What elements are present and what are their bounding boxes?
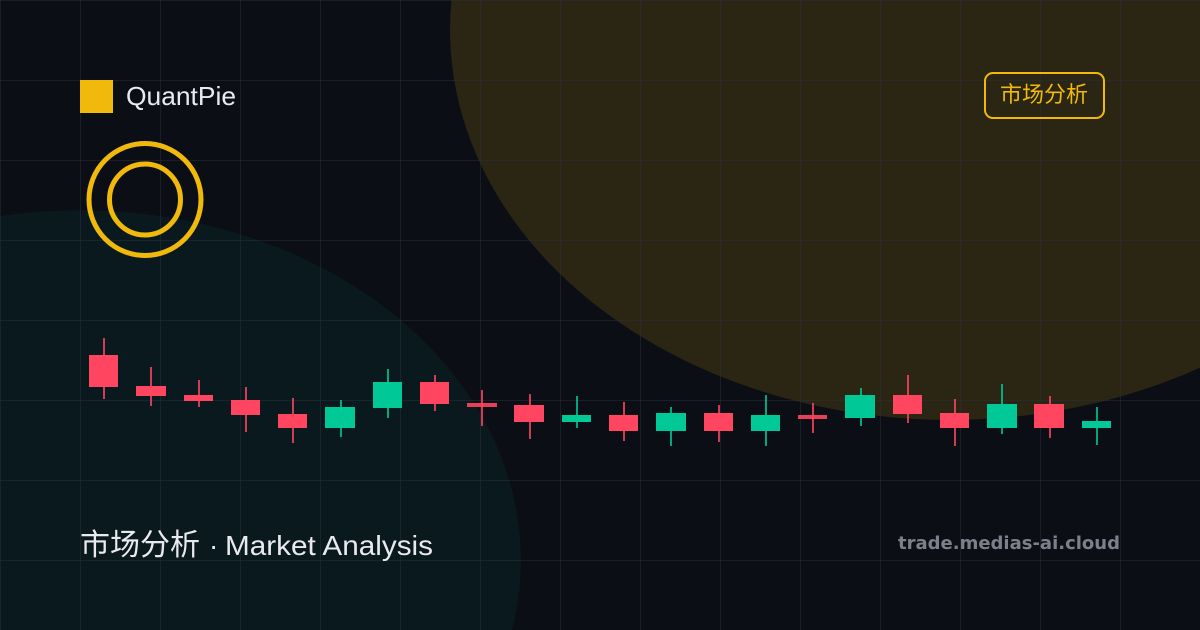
candle 8	[420, 375, 449, 411]
icon: concentric rings	[89, 144, 201, 256]
footer title: ·	[209, 530, 218, 561]
candle 9	[467, 390, 497, 426]
candle 18	[893, 375, 922, 423]
candle 5	[278, 398, 307, 443]
background blob: teal	[0, 210, 521, 630]
tag: market analysis: 市场分析	[1000, 77, 1088, 109]
candle 16	[798, 403, 827, 433]
candle 19	[940, 399, 969, 446]
tag: market analysis	[985, 73, 1104, 118]
footer title: 市场分析	[80, 520, 200, 564]
candle 11	[562, 396, 591, 428]
candle 22	[1082, 407, 1111, 445]
candle 21	[1034, 396, 1064, 438]
candle 7	[373, 369, 402, 418]
candle 10	[514, 394, 544, 439]
background blob: gold	[450, 0, 1200, 420]
candle 14	[704, 405, 733, 442]
candle 2	[136, 367, 166, 406]
icon: logo square	[80, 80, 113, 113]
brand name: QuantPie	[126, 81, 236, 111]
candle 17	[845, 388, 875, 426]
candle 20	[987, 384, 1017, 434]
candlestick chart	[89, 338, 1111, 446]
footer url: trade.medias-ai.cloud	[898, 533, 1120, 554]
footer title: Market Analysis	[225, 530, 433, 561]
candle 1	[89, 338, 118, 399]
candle 3	[184, 380, 213, 407]
candle 6	[325, 400, 355, 437]
candle 13	[656, 407, 686, 446]
candle 12	[609, 402, 638, 441]
candle 4	[231, 387, 260, 432]
candle 15	[751, 395, 780, 446]
logo	[80, 80, 236, 113]
footer title	[80, 520, 433, 564]
